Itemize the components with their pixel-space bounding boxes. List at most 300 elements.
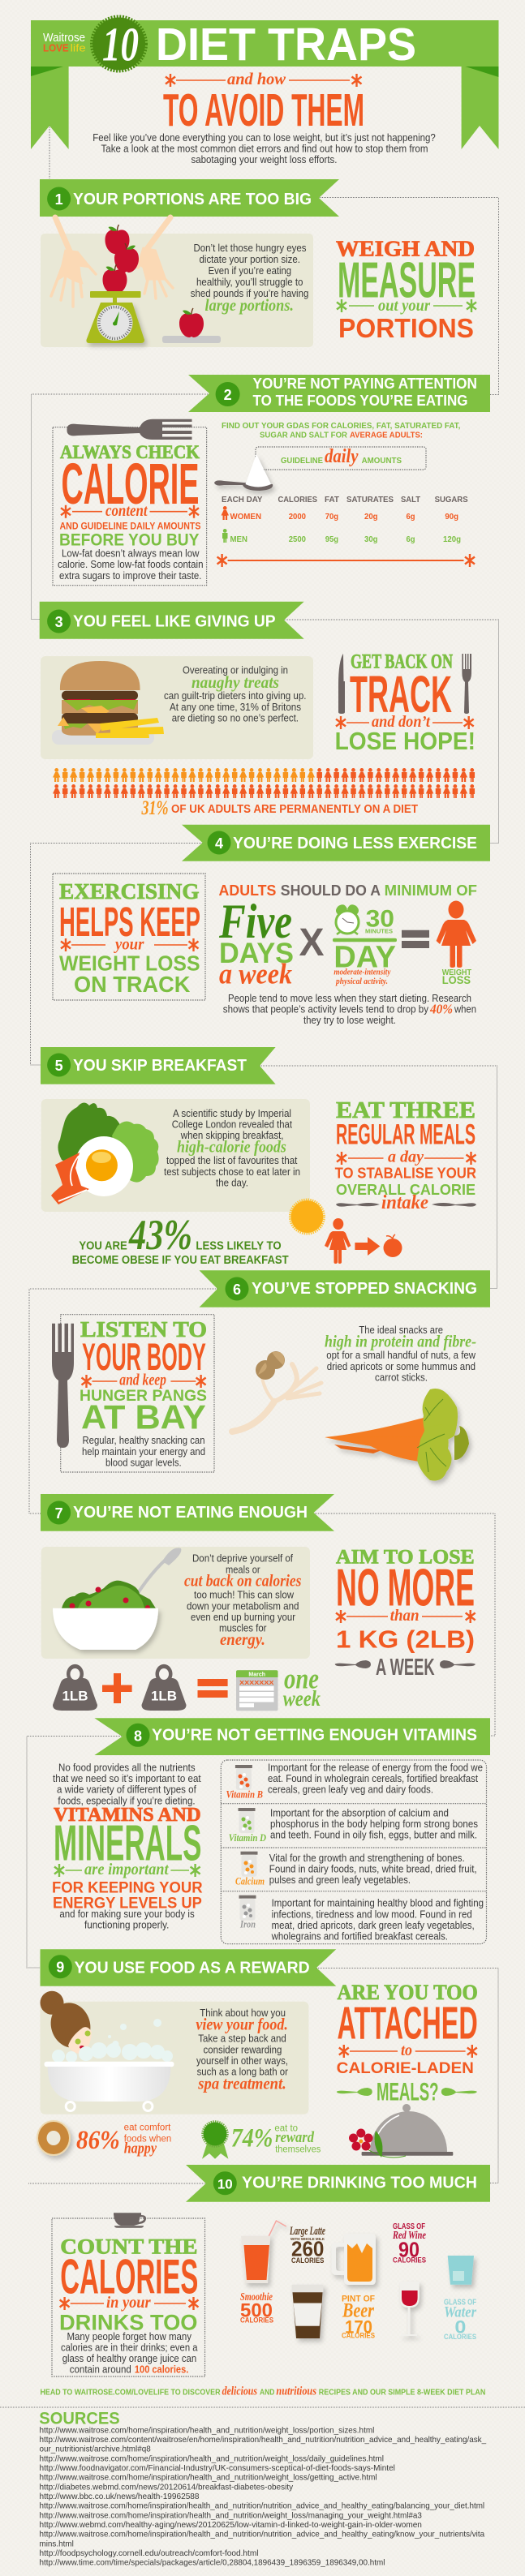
row: iron: Iron — [239, 1919, 256, 1930]
row: vitamin b: eat. Found in wholegrain cereals, fortified breakfast — [268, 1773, 478, 1784]
banner 9 — [41, 1949, 336, 1986]
drink: beer: PINT OF — [342, 2294, 375, 2303]
panel: exercising helps keep weight loss on track: EXERCISING — [59, 879, 200, 904]
weight 1: 1LB — [62, 1689, 88, 1704]
row: women — [221, 506, 458, 522]
icon: alarm clock — [336, 904, 359, 934]
icon: woman figure, weight loss — [437, 900, 476, 986]
text: glass of healthy orange juice can — [62, 2353, 196, 2364]
row: women: 90g — [445, 512, 458, 522]
stat: 43% less likely to become obese: LESS LIKELY TO — [196, 1240, 282, 1253]
icon: rosette — [202, 2122, 228, 2159]
heading: are important — [84, 1861, 170, 1878]
panel text: A scientific study by Imperial — [173, 1108, 291, 1119]
gda intro: SUGAR AND SALT FOR — [260, 430, 347, 440]
heading: weigh and measure out your portions: PORTIONS — [338, 313, 474, 343]
stat: 43% less likely to become obese: 43% — [128, 1212, 192, 1259]
row: iron — [239, 1896, 484, 1943]
panel text: even end up burning your — [191, 1612, 295, 1623]
icon: hand holding peanut — [232, 1351, 321, 1432]
drink: water — [444, 2256, 477, 2342]
banner 1 — [40, 179, 339, 217]
guideline daily amounts label: AMOUNTS — [362, 456, 402, 466]
heading: LISTEN TO — [80, 1317, 207, 1342]
drink: smoothie: 500 — [240, 2300, 273, 2322]
drink: red wine: GLASS OF — [393, 2222, 425, 2231]
row: men: 95g — [325, 535, 338, 544]
heading: adults should do a minimum of: SHOULD DO A — [281, 882, 381, 899]
dotted route connecting the sections — [27, 126, 498, 2183]
table header: SALT — [401, 495, 421, 504]
icon: woman figure, weight loss: LOSS — [442, 973, 471, 986]
icon: knife — [338, 654, 345, 714]
intro text — [53, 1762, 201, 1806]
logo: Waitrose Love Life: Waitrose — [43, 31, 85, 45]
heading: ENERGY LEVELS UP — [53, 1895, 202, 1913]
banner 2: 2 — [224, 387, 232, 403]
stat: 86% comfort foods: eat comfort — [124, 2123, 171, 2133]
text — [58, 548, 204, 582]
equation: 30 minutes a day: moderate-intensity — [334, 968, 390, 977]
sources list: http://www.waitrose.com/home/inspiration/health_and_nutrition/weight_loss/managing_your_weight.html#a3 — [39, 2510, 422, 2520]
row: vitamin d: Vitamin D — [229, 1832, 266, 1844]
snacks text — [325, 1324, 476, 1384]
call to action line: HEAD TO WAITROSE.COM/LOVELIFE TO DISCOVER — [41, 2388, 221, 2397]
drink: large latte: 260 — [291, 2239, 324, 2261]
row: men: 2500 — [289, 535, 306, 544]
banner 6: 6 — [233, 1282, 241, 1298]
caption: 31% — [141, 797, 169, 819]
sources list: our_nutritionist/archive.html#q8 — [39, 2445, 151, 2454]
row: men — [222, 529, 461, 544]
drink: red wine — [392, 2222, 426, 2336]
equation: five days a week: a week — [219, 958, 292, 990]
heading: are you too attached: ARE YOU TOO — [338, 1981, 478, 2004]
exercise text: People tend to move less when they start dieting. Research — [228, 993, 471, 1004]
row: vitamin b: Important for the release of energy from the food we — [268, 1762, 483, 1773]
drink: water: CALORIES — [444, 2333, 476, 2342]
equation: 30 minutes a day — [333, 904, 397, 986]
header ribbon — [31, 16, 498, 149]
panel: always check calorie — [53, 419, 207, 586]
panel text: College London revealed that — [172, 1119, 292, 1131]
exercise text: 40% — [429, 1001, 453, 1017]
panel text: large portions. — [204, 295, 294, 315]
equation: five days a week: Five — [218, 895, 292, 948]
sources list: http://www.waitrose.com/home/inspiration/health_and_nutrition/weight_loss/portion_sizes.html — [39, 2425, 374, 2435]
stat: 86% comfort foods — [37, 2120, 171, 2157]
row: calcium: Calcium — [235, 1875, 265, 1887]
row: men: 30g — [364, 535, 378, 544]
panel text — [164, 665, 307, 723]
intro text: a wide variety of different types of — [57, 1784, 196, 1796]
heading — [80, 1317, 207, 1436]
badge: 10: 10 — [102, 18, 139, 71]
equation: 30 minutes a day: DAY — [334, 940, 396, 974]
text: help maintain your energy and — [82, 1446, 205, 1458]
heading — [59, 442, 201, 550]
panel text: Don’t deprive yourself of — [192, 1553, 293, 1565]
snacks text: high in protein and fibre- — [325, 1332, 476, 1351]
banner 8: 8 — [134, 1728, 142, 1744]
panel: count the calories — [52, 2213, 204, 2376]
row: iron: Important for maintaining healthy blood and fighting — [272, 1898, 484, 1909]
sources list — [39, 2425, 486, 2568]
guideline daily amounts label: daily — [325, 446, 359, 467]
drink: red wine: Red Wine — [392, 2229, 426, 2241]
sources list: http://www.bbc.co.uk/news/health-19962588 — [39, 2492, 200, 2501]
exercise text: they try to lose weight. — [303, 1015, 396, 1026]
icon: fork — [462, 654, 471, 714]
snacks text: opt for a small handful of nuts, a few — [326, 1350, 476, 1361]
intro text: that we need so it’s important to eat — [53, 1773, 201, 1784]
row two: 50 orange figures — [53, 784, 475, 798]
heading: AT BAY — [81, 1398, 206, 1436]
subtitle: and how to avoid them: and how — [227, 69, 286, 88]
heading: adults should do a minimum of — [219, 882, 477, 899]
panel text: Don’t let those hungry eyes — [193, 243, 307, 254]
stat: 86% comfort foods: happy — [124, 2140, 157, 2157]
stat: 74% eat to reward: themselves — [275, 2145, 321, 2154]
drink: beer: CALORIES — [342, 2332, 375, 2341]
panel text: topped the list of favourites that — [166, 1155, 298, 1166]
snacks text: carrot sticks. — [375, 1372, 428, 1384]
text: Regular, healthy snacking can — [83, 1435, 205, 1446]
banner 3 — [40, 602, 304, 639]
drink: smoothie — [240, 2221, 286, 2325]
heading: eat three regular meals: TO STABALISE YOUR — [335, 1166, 476, 1182]
exercise text: shows that people’s activity levels tend to drop by — [223, 1003, 429, 1015]
snacks text: The ideal snacks are — [359, 1324, 443, 1336]
heading: YOUR BODY — [82, 1335, 206, 1378]
heading: aim to lose no more than 1kg: A WEEK — [376, 1655, 435, 1681]
exercise text — [223, 993, 476, 1026]
icon: sun — [290, 1200, 324, 1234]
banner 5: YOU SKIP BREAKFAST — [73, 1057, 247, 1075]
panel text: Even if you’re eating — [209, 265, 291, 277]
subtitle: and how to avoid them — [163, 69, 364, 135]
heading: eat three regular meals: OVERALL CALORIE — [336, 1182, 476, 1198]
heading: aim to lose no more than 1kg — [335, 1544, 476, 1681]
exercise text: when — [454, 1003, 476, 1015]
table header: CALORIES — [278, 495, 317, 504]
weight 1 — [53, 1664, 97, 1711]
stat: 86% comfort foods: foods when — [124, 2135, 171, 2145]
icon: salad bowl — [53, 1548, 181, 1650]
row: vitamin b — [226, 1762, 483, 1801]
caption — [141, 797, 418, 819]
heading: get back on track: LOSE HOPE! — [335, 728, 476, 755]
panel: skip breakfast — [41, 1099, 310, 1212]
sources heading: SOURCES — [39, 2409, 120, 2428]
heading: ALWAYS CHECK — [60, 442, 200, 462]
panel text — [184, 1553, 301, 1649]
heading: CALORIES — [60, 2249, 198, 2304]
banner 4: 4 — [215, 835, 223, 852]
banner 10: 10 — [217, 2177, 233, 2192]
row: vitamin d — [229, 1807, 478, 1844]
heading: in your — [106, 2294, 151, 2312]
banner 5 — [41, 1047, 276, 1084]
snacks text: dried apricots or some hummus and — [327, 1361, 476, 1372]
icon: wine glass — [400, 2282, 420, 2336]
drink: red wine: CALORIES — [393, 2256, 426, 2265]
panel text: Take a step back and — [198, 2033, 286, 2045]
row: calcium — [235, 1852, 477, 1887]
table header: FAT — [325, 495, 340, 504]
banner 3: YOU FEEL LIKE GIVING UP — [73, 613, 276, 631]
intro text: No food provides all the nutrients — [58, 1762, 196, 1773]
panel text — [191, 243, 308, 315]
sources list: http://www.webmd.com/healthy-aging/news/20120625/low-vitamin-d-linked-to-weight-gain-in-older-women — [39, 2520, 422, 2530]
row: vitamin b: cereals, green leafy veg and dairy foods. — [268, 1784, 433, 1796]
gda intro: FIND OUT YOUR GDAS FOR CALORIES, FAT, SATURATED FAT, — [222, 421, 460, 431]
banner 4: YOU’RE DOING LESS EXERCISE — [233, 835, 477, 852]
drink: red wine: 90 — [398, 2239, 420, 2262]
people chart: 31% of UK adults — [53, 768, 475, 819]
equation: five days a week — [218, 895, 294, 990]
stat: 43% less likely to become obese — [72, 1212, 289, 1267]
stat: 74% eat to reward — [202, 2122, 321, 2159]
panel: not eating enough — [41, 1547, 310, 1659]
banner 5: 5 — [55, 1058, 63, 1074]
panel text: Think about how you — [200, 2007, 286, 2019]
icon: breakfast plate — [51, 1102, 159, 1204]
panel: exercising helps keep weight loss on track: ON TRACK — [74, 972, 191, 997]
intro text: Take a look at the most common diet errors and find out how to stop them from — [101, 143, 428, 154]
banner 7: YOU’RE NOT EATING ENOUGH — [73, 1504, 308, 1522]
sources list: http://diabetes.webmd.com/news/20120614/breakfast-diabetes-obesity — [39, 2482, 294, 2492]
heading: COUNT THE — [60, 2234, 198, 2258]
panel text — [196, 2007, 288, 2093]
panel: exercising helps keep weight loss on track: WEIGHT LOSS — [59, 953, 200, 976]
panel text: spa treatment. — [197, 2074, 286, 2093]
text: calories are in their drinks; even a — [61, 2342, 198, 2354]
row: calcium: Vital for the growth and strengthening of bones. — [269, 1853, 465, 1864]
sources list: http://www.time.com/time/specials/packages/article/0,28804,1896439_1896359_1896349,00.html — [39, 2558, 385, 2568]
icon: doughnut — [37, 2120, 71, 2156]
call to action line: nutritious — [276, 2385, 316, 2398]
weight 2: 1LB — [151, 1689, 177, 1704]
gda table — [217, 495, 475, 567]
drink: smoothie: Smoothie — [240, 2290, 273, 2303]
heading: eat three regular meals: intake — [381, 1192, 428, 1213]
banner 10: YOU’RE DRINKING TOO MUCH — [242, 2175, 477, 2192]
logo: Waitrose Love Life: life — [71, 42, 86, 54]
heading: are you too attached: to — [401, 2041, 412, 2059]
row: women: 70g — [325, 512, 338, 522]
heading: are you too attached — [337, 1981, 478, 2106]
panel: food as reward — [41, 1991, 308, 2114]
logo: Waitrose Love Life — [43, 31, 86, 54]
closing text: and for making sure your body is — [59, 1908, 195, 1920]
banner 7 — [41, 1494, 334, 1531]
drink: large latte: Large Latte — [289, 2225, 325, 2238]
calendar: March — [248, 1672, 265, 1677]
icon: carrots — [325, 1389, 469, 1481]
text: 100 calories. — [135, 2364, 188, 2376]
row: calcium: pulses and green leafy vegetables. — [269, 1874, 411, 1886]
panel text — [164, 1108, 300, 1189]
panel: exercising helps keep weight loss on track: your — [114, 936, 144, 954]
heading: AND GUIDELINE DAILY AMOUNTS — [60, 521, 201, 532]
panel text: are dieting so no one’s perfect. — [172, 712, 299, 723]
heading: are you too attached: CALORIE-LADEN — [337, 2059, 474, 2077]
multiply sign: X — [299, 921, 325, 964]
table header: SATURATES — [346, 495, 394, 504]
banner 6 — [200, 1270, 490, 1307]
sources list: http://www.foodnavigator.com/Financial-Industry/UK-consumers-sceptical-of-diet-foods-says-Mintel — [39, 2463, 395, 2473]
heading: weigh and measure out your portions: out your — [378, 297, 430, 315]
banner 4 — [182, 825, 490, 861]
gda intro — [222, 421, 460, 440]
equation: 30 minutes a day: 30 — [366, 906, 394, 933]
heading: get back on track: and don’t — [372, 713, 431, 731]
stat: 43% less likely to become obese: BECOME OBESE IF YOU EAT BREAKFAST — [72, 1254, 289, 1267]
drink: smoothie: CALORIES — [240, 2316, 273, 2325]
banner 7: 7 — [55, 1505, 63, 1522]
panel: exercising helps keep weight loss on track: HELPS KEEP — [59, 899, 200, 945]
table header — [222, 495, 468, 504]
subtitle: and how to avoid them: TO AVOID THEM — [163, 84, 364, 135]
one week — [283, 1663, 321, 1711]
panel text: too much! This can slow — [194, 1590, 295, 1601]
stat: 43% less likely to become obese: YOU ARE — [79, 1240, 127, 1253]
icon: cloche with flower — [349, 2104, 453, 2157]
sources list: http://www.waitrose.com/content/waitrose/en/home/inspiration/health_and_nutrition/nutrition_advice_and_healthy_eating/ask_ — [39, 2435, 486, 2445]
drink: large latte: CALORIES — [291, 2256, 324, 2265]
heading: content — [105, 502, 148, 520]
banner 1: YOUR PORTIONS ARE TOO BIG — [73, 191, 312, 208]
stat: 74% eat to reward: eat to — [274, 2124, 298, 2134]
caption: OF UK ADULTS ARE PERMANENTLY ON A DIET — [171, 803, 418, 816]
row: women: WOMEN — [230, 512, 261, 522]
heading: weigh and measure out your portions — [336, 237, 476, 343]
panel: exercising helps keep weight loss on track — [53, 874, 205, 1000]
heading: eat three regular meals — [335, 1097, 476, 1213]
icon: woman figure, weight loss: WEIGHT — [442, 968, 471, 977]
table header: SUGARS — [435, 495, 468, 504]
stat: 74% eat to reward: 74% — [231, 2124, 273, 2153]
drink: water: GLASS OF — [444, 2298, 476, 2308]
banner 2: YOU’RE NOT PAYING ATTENTION — [253, 375, 477, 392]
row: iron: wholegrains and fortified breakfast cereals. — [271, 1931, 448, 1943]
panel text: shed pounds if you’re having — [191, 288, 308, 299]
intro text: sabotaging your weight loss efforts. — [191, 154, 338, 165]
call to action line: delicious — [222, 2385, 257, 2398]
row: women: 6g — [406, 512, 415, 522]
text — [82, 1435, 205, 1469]
panel text: naughy treats — [191, 672, 279, 692]
banner 2 — [188, 375, 490, 412]
banner 2: TO THE FOODS YOU’RE EATING — [253, 392, 467, 409]
panel text: Overeating or indulging in — [183, 665, 288, 676]
banner 9: YOU USE FOOD AS A REWARD — [75, 1960, 310, 1977]
guideline daily amounts label: GUIDELINE — [281, 456, 323, 466]
one week: week — [283, 1686, 321, 1711]
intro text: Feel like you’ve done everything you can to lose weight, but it’s just not happening? — [93, 132, 436, 144]
heading — [59, 2234, 198, 2335]
panel text: when skipping breakfast, — [180, 1130, 284, 1141]
sources list: http://foodpsychology.cornell.edu/outreach/comfort-food.html — [39, 2548, 258, 2558]
text: Low-fat doesn’t always mean low — [62, 548, 200, 560]
icon: hands — [51, 217, 173, 307]
drink: beer — [331, 2234, 376, 2341]
closing text: functioning properly. — [84, 1919, 169, 1930]
row: men: 120g — [443, 535, 461, 544]
panel text: the day. — [216, 1178, 248, 1189]
panel text: cut back on calories — [184, 1571, 301, 1591]
icon: coffee cup — [292, 2285, 323, 2338]
banner 8: YOU’RE NOT GETTING ENOUGH VITAMINS — [152, 1727, 477, 1745]
row: iron: meat, dried apricots, dark green leafy vegetables, — [272, 1920, 475, 1931]
heading: VITAMINS AND — [54, 1805, 201, 1826]
icon: fork vertical — [52, 1324, 74, 1448]
icon: spoon with sugar — [214, 454, 273, 491]
banner 3: 3 — [55, 614, 63, 630]
row: women: 20g — [364, 512, 378, 522]
panel: portions — [41, 217, 313, 347]
equation: 30 minutes a day: physical activity. — [335, 977, 388, 986]
call to action line — [41, 2385, 485, 2398]
icon: beer mug — [331, 2234, 376, 2285]
drink: large latte — [289, 2225, 325, 2338]
panel text: consider rewarding — [203, 2044, 282, 2055]
panel text: test subjects chose to eat later in — [164, 1166, 300, 1178]
panel text: down your metabolism and — [187, 1600, 299, 1612]
stat: 74% eat to reward: reward — [275, 2129, 314, 2146]
guideline daily amounts label — [256, 446, 426, 470]
title: diet traps: DIET TRAPS — [156, 19, 416, 70]
banner 1: 1 — [55, 191, 63, 208]
heading: and keep — [119, 1372, 166, 1389]
logo: Waitrose Love Life: LOVE — [43, 42, 69, 54]
icon: cup — [114, 2213, 146, 2228]
panel text: dictate your portion size. — [200, 254, 300, 265]
row: iron: infections, tiredness and low mood. Found in red — [272, 1908, 472, 1920]
panel: listen to your body — [52, 1315, 214, 1472]
text — [61, 2331, 198, 2376]
heading: FOR KEEPING YOUR — [52, 1878, 203, 1896]
drink: beer: Beer — [342, 2300, 374, 2322]
heading: aim to lose no more than 1kg: 1 KG (2LB) — [336, 1625, 475, 1654]
intro text: foods, especially if you’re dieting. — [58, 1795, 196, 1806]
equation: 30 minutes a day: MINUTES — [365, 928, 393, 935]
call to action line: AND — [260, 2388, 274, 2397]
icon: woman in bubble bath — [41, 1991, 174, 2110]
intro text — [93, 132, 436, 165]
icon: fork horizontal — [67, 419, 192, 440]
calendar: XXXXXXX — [239, 1679, 274, 1686]
vitamins table — [221, 1760, 487, 1944]
text: Many people forget how many — [67, 2331, 192, 2342]
icon: apple on plate — [162, 308, 221, 343]
heading: get back on track: GET BACK ON — [351, 650, 453, 673]
panel text: view your food. — [196, 2015, 288, 2034]
stat: 86% comfort foods: 86% — [76, 2126, 120, 2155]
panel text: muscles for — [219, 1623, 266, 1634]
sources list: mins.html — [39, 2539, 74, 2548]
icon: water glass — [448, 2256, 474, 2285]
heading: adults should do a minimum of: MINIMUM OF — [385, 882, 477, 899]
row one: 31 amber and 19 orange figures — [53, 768, 475, 782]
panel text: energy. — [220, 1629, 265, 1649]
one week: one — [284, 1663, 319, 1695]
equation: five days a week: DAYS — [219, 938, 294, 969]
equation: two 1lb weights equal one week — [53, 1663, 321, 1711]
icon: burger and fries — [52, 661, 164, 745]
call to action line: RECIPES AND OUR SIMPLE 8-WEEK DIET PLAN — [319, 2388, 485, 2397]
